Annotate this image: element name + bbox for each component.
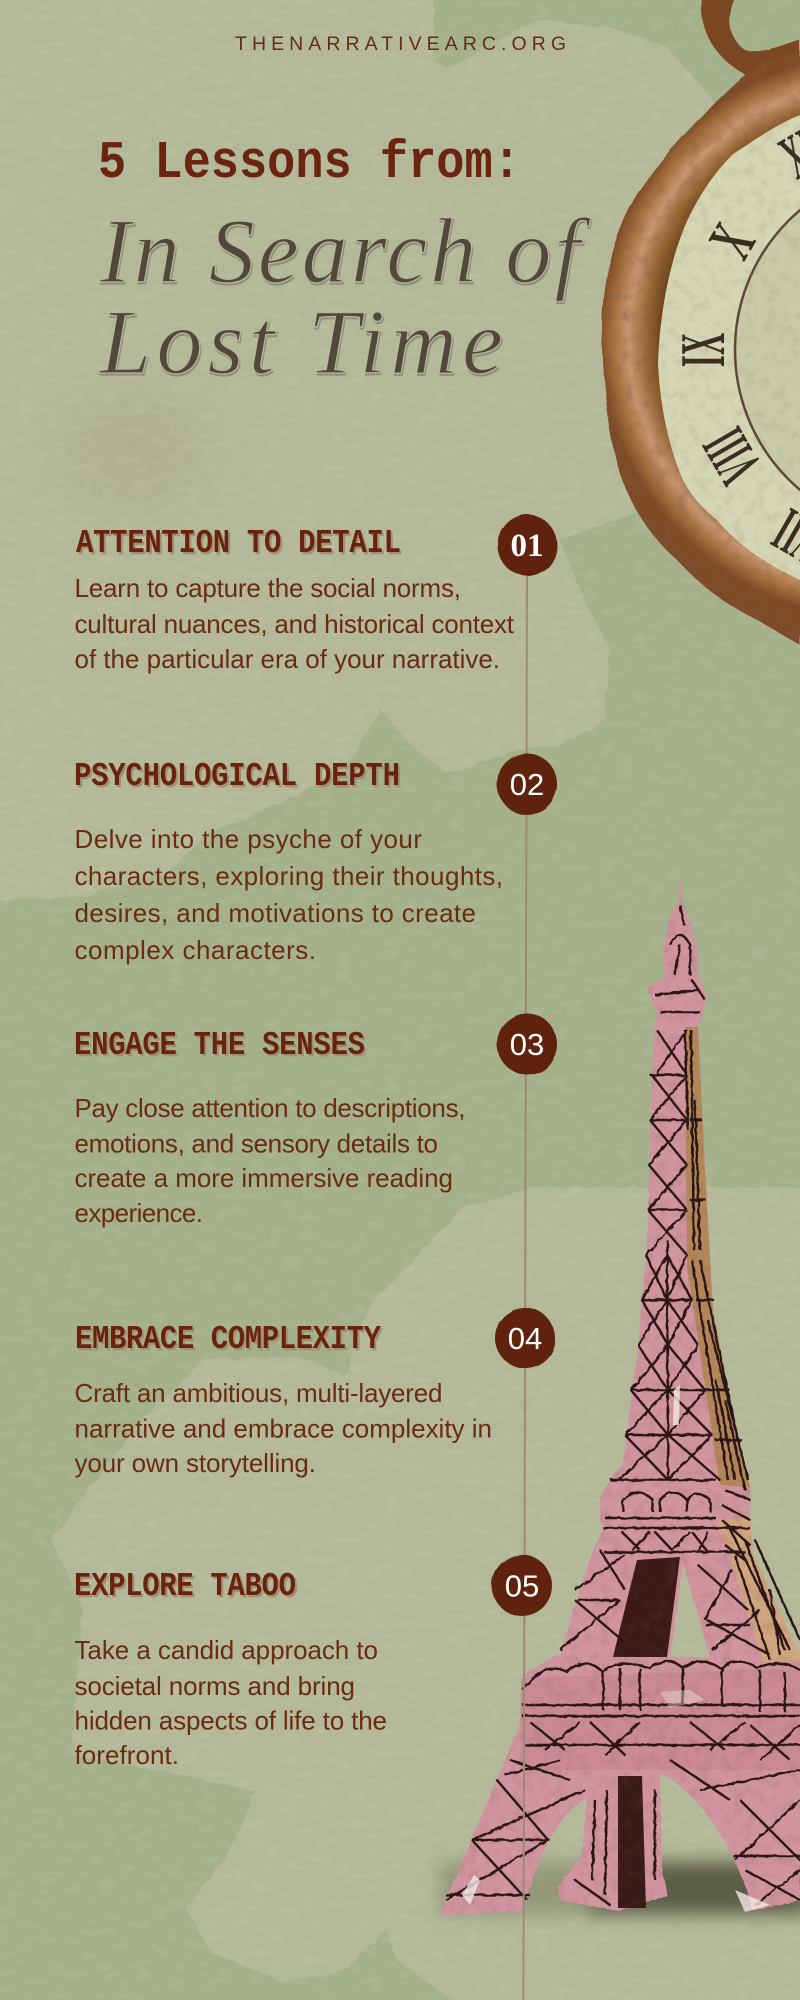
lesson 2 body xyxy=(74,824,503,965)
numeral VIII: VIII xyxy=(688,417,775,496)
lesson 2 xyxy=(74,754,557,965)
inner dial circle xyxy=(735,167,800,533)
icon: pocket watch xyxy=(602,0,800,645)
lesson 3 body: Pay close attention to descriptions, xyxy=(74,1093,466,1123)
first platform tint xyxy=(520,1668,800,1770)
lesson 1 number badge: 01 xyxy=(510,528,544,564)
lesson 1 xyxy=(74,514,556,674)
ground shadow xyxy=(440,1862,800,1914)
title line: 5 Lessons from: 5 Lessons from: xyxy=(98,133,521,193)
lesson 5 body: forefront. xyxy=(74,1740,179,1770)
lesson 5 body xyxy=(74,1635,387,1770)
lesson 3 body: emotions, and sensory details to xyxy=(74,1128,438,1158)
lesson 1 body: of the particular era of your narrative. xyxy=(74,644,500,674)
illustration: Eiffel tower xyxy=(440,877,800,1915)
lesson 4 body: narrative and embrace complexity in xyxy=(74,1414,492,1444)
lesson 5 heading: EXPLORE TABOO xyxy=(74,1568,296,1606)
watch case ring xyxy=(602,52,800,645)
lesson 1 body: cultural nuances, and historical context xyxy=(74,609,515,639)
lesson 2 number badge: 02 xyxy=(510,767,544,802)
dial aging spots xyxy=(658,115,800,580)
lesson 2 number badge xyxy=(497,754,557,814)
lesson 5 number badge: 05 xyxy=(505,1568,539,1604)
timeline line xyxy=(523,575,527,2000)
lesson 4 body: Craft an ambitious, multi-layered xyxy=(74,1378,442,1408)
lesson 4 xyxy=(74,1308,555,1478)
lesson 4 number badge: 04 xyxy=(508,1321,542,1356)
script title: Lost Time xyxy=(98,291,503,393)
lesson 4 heading: EMBRACE COMPLEXITY xyxy=(75,1321,381,1359)
lesson 1 body xyxy=(74,573,515,674)
lesson 4 body xyxy=(74,1378,492,1478)
lesson 5 number badge xyxy=(492,1555,552,1616)
lesson 3 heading: ENGAGE THE SENSES xyxy=(74,1027,365,1065)
lesson 2 body: Delve into the psyche of your xyxy=(74,824,422,854)
site URL: THENARRATIVEARC.ORG xyxy=(235,33,566,55)
lesson 2 body: desires, and motivations to create xyxy=(74,898,476,928)
lesson 3 body: experience. xyxy=(74,1198,203,1228)
lesson 5 body: societal norms and bring xyxy=(74,1671,355,1701)
numeral IX: IX xyxy=(667,333,738,367)
lesson 5 body: Take a candid approach to xyxy=(74,1635,378,1665)
lesson 5 body: hidden aspects of life to the xyxy=(74,1706,387,1736)
lesson 2 heading: PSYCHOLOGICAL DEPTH xyxy=(74,758,400,796)
dark inner panel xyxy=(613,1557,680,1657)
lesson 1 body: Learn to capture the social norms, xyxy=(74,573,461,603)
lesson 1 number badge xyxy=(498,514,556,576)
tower shading: gold side xyxy=(685,1027,750,1487)
lesson 3 xyxy=(74,1014,557,1228)
lattice lines xyxy=(446,905,800,1905)
tower highlights xyxy=(462,1385,770,1912)
lesson 5 xyxy=(74,1555,552,1770)
lesson 2 body: characters, exploring their thoughts, xyxy=(74,861,503,891)
lesson 3 body: create a more immersive reading xyxy=(74,1163,453,1193)
watch dial xyxy=(658,115,800,580)
tower silhouette xyxy=(440,877,800,1915)
lesson 1 heading: ATTENTION TO DETAIL xyxy=(76,525,401,563)
watch hook xyxy=(701,0,800,77)
lesson 3 number badge xyxy=(497,1014,557,1074)
lesson 3 body xyxy=(74,1093,466,1228)
central pillar shade xyxy=(618,1776,646,1908)
script title: In Search of xyxy=(99,200,591,302)
lesson 2 body: complex characters. xyxy=(74,935,316,965)
numeral X: X xyxy=(696,213,769,270)
lesson 4 body: your own storytelling. xyxy=(74,1448,316,1478)
lesson 4 number badge xyxy=(495,1308,555,1368)
tower mottling xyxy=(440,877,800,1915)
lesson 3 number badge: 03 xyxy=(510,1027,544,1062)
script title xyxy=(98,200,591,393)
